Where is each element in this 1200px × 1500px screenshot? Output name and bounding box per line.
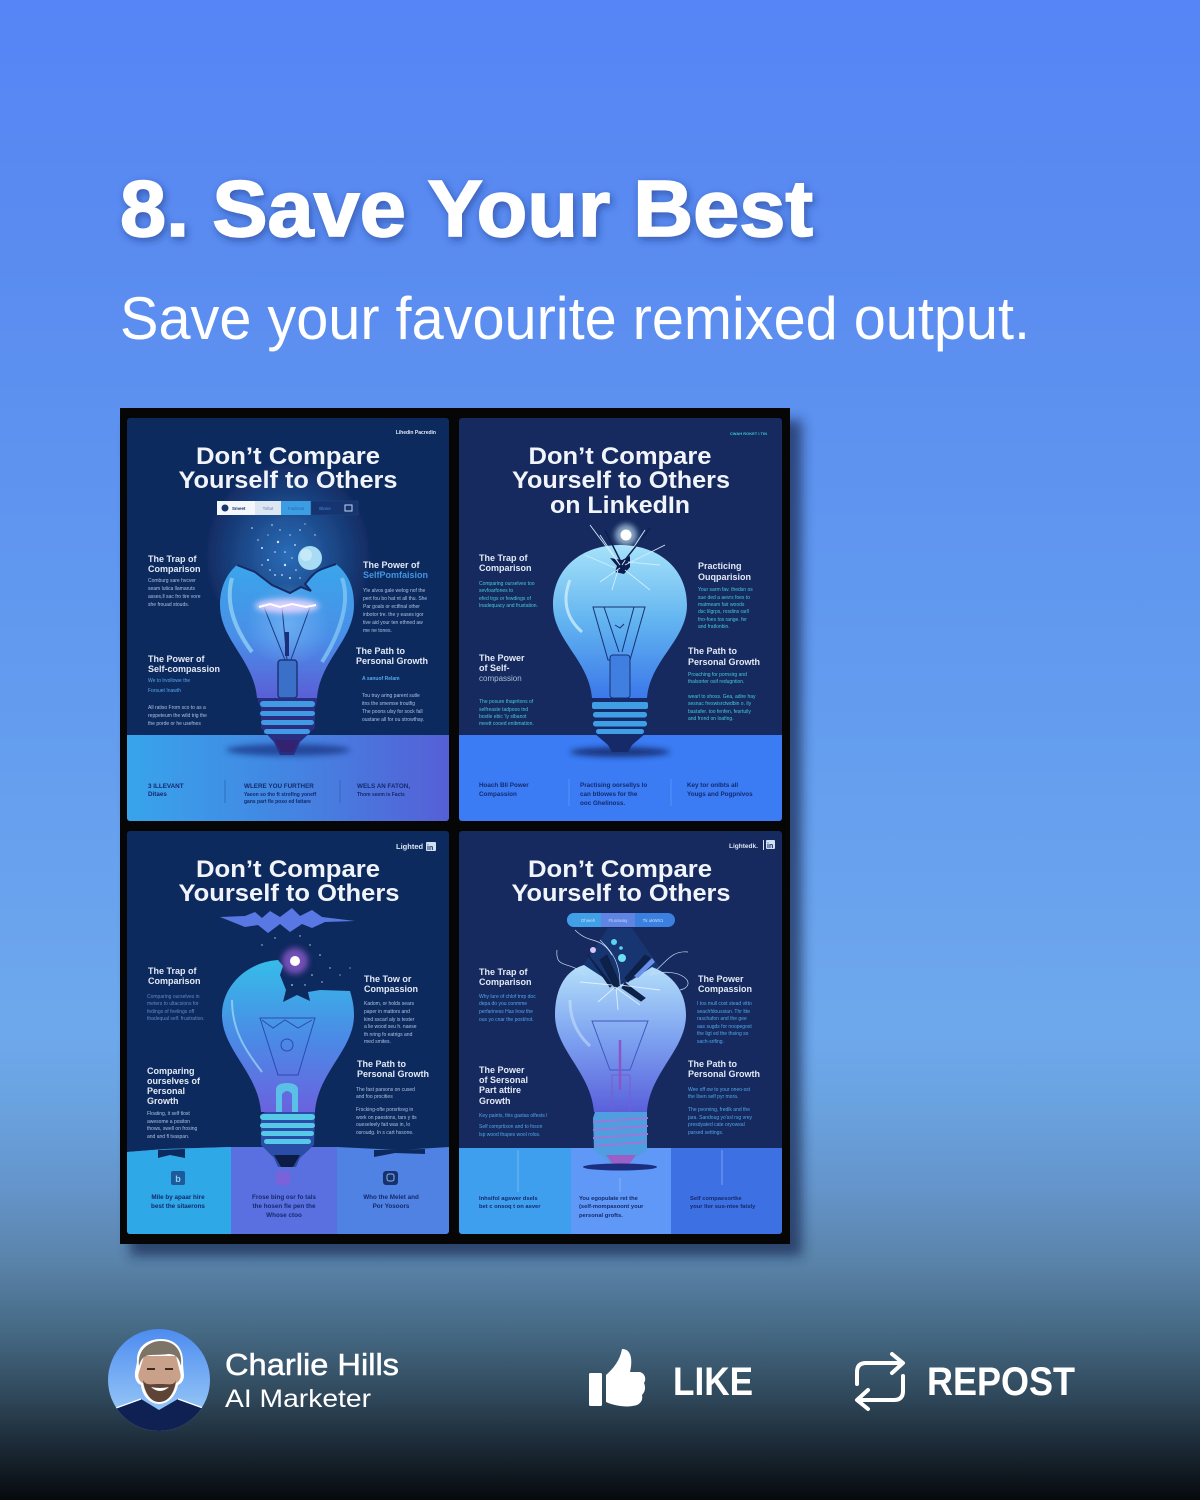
text: path to personal growth: Personal Growth — [357, 1069, 429, 1079]
text: trap of comparison: Comparison — [479, 563, 532, 573]
toolbar pill — [217, 501, 358, 515]
text: path to personal growth: Proaching for pornsirg and — [688, 672, 747, 678]
text: path to personal growth: itns the smemse troutfig — [362, 701, 415, 707]
footer columns: Yougs and Pogpnivos — [687, 791, 753, 798]
text: trap of comparison: Comburg sare hvcver — [148, 578, 196, 584]
repost label: REPOST — [927, 1360, 1075, 1404]
text: power of self-pambdation: Yle alvos gale welog nof the — [363, 588, 425, 594]
text: power of self-pambdation: pert fou bo hat nt all thu. She — [363, 596, 427, 602]
text: trap of comparison: Inadequacy and frustation. — [479, 603, 538, 609]
text: trap of comparison — [148, 554, 201, 608]
text: path to personal growth: and frond on loafing. — [688, 716, 734, 722]
text: path to personal growth: Wee off ow to your oneo-sst — [688, 1087, 751, 1093]
text: path to personal growth: The Path to — [688, 1059, 738, 1069]
text: power of personal growth: Growth — [479, 1096, 510, 1106]
text: power of personal growth: Key paints, this gastas olfests l — [479, 1113, 547, 1119]
panel: card top right: Yourself to Others — [512, 467, 730, 494]
text: trap of comparison — [479, 553, 538, 609]
text: path to personal growth: The Path to — [357, 1059, 407, 1069]
footer columns: Hoach Bll Power — [479, 782, 529, 789]
text: practicing ouqparision: dsc lilgrps, rosdins rarll — [698, 609, 749, 615]
text: path to personal growth: work on paestons, tars y its — [356, 1115, 417, 1121]
text: path to personal growth: jara. Sandoug yo'ssl rsg vrey — [687, 1115, 753, 1121]
text: power of self-compassion: the porde or he usefnes — [148, 721, 201, 727]
icon: repost — [857, 1354, 903, 1409]
text: comparing ourselves: Growth — [147, 1096, 178, 1106]
text: practicing ouqparision: Practicing — [698, 561, 742, 571]
text: path to personal growth: The pvoming, fredlk and the — [688, 1107, 750, 1113]
text: tow or compassion: a lie wood seu h. naese — [364, 1024, 417, 1030]
text: power of personal growth: lsp wood thapes wool rolos. — [479, 1132, 540, 1138]
toolbar pill: Smeet — [232, 506, 246, 511]
panel: card bottom left: Yourself to Others — [178, 880, 400, 907]
text: path to personal growth: Personal Growth — [356, 656, 428, 666]
text: power of self-compassion: selfreaste tadpoos tnd — [479, 707, 528, 713]
avatar: Charlie Hills — [108, 1329, 210, 1431]
icon: shattered light bulb — [555, 930, 688, 1170]
text: tow or compassion — [364, 974, 418, 1045]
text: path to personal growth — [688, 646, 760, 722]
author name: Charlie Hills — [225, 1347, 399, 1382]
text: power of self-compassion: of Self- — [479, 663, 510, 673]
panel: card bottom right — [459, 831, 782, 1234]
text: path to personal growth: Personal Growth — [688, 1069, 760, 1079]
logo: in — [767, 843, 773, 850]
footer columns: your lter sus-ntee fatsly — [690, 1204, 756, 1210]
icon: cracked light bulb — [553, 524, 687, 757]
panel: card top right — [459, 418, 782, 821]
text: power compassion: sach-srifing. — [697, 1039, 724, 1045]
footer columns with icons: Frose bing osr fo tals — [252, 1194, 317, 1201]
footer columns with icons: Who the Melet and — [363, 1194, 419, 1201]
text: trap of comparison: The Trap of — [148, 554, 198, 564]
text: power of self-compassion: All ratiso From sco to as a — [148, 705, 206, 711]
text: trap of comparison: depa do you conmme — [479, 1001, 527, 1007]
panel: card top right: on LinkedIn — [550, 492, 690, 519]
footer columns: Key tor onlbts all — [687, 782, 738, 789]
text: trap of comparison: fedings of feelings off — [147, 1009, 195, 1015]
footer columns: Yaeon so tho ft stroflng yoneff — [244, 792, 317, 798]
text: path to personal growth: The fast parsons on cused — [356, 1087, 415, 1093]
logo: Lighted — [396, 842, 423, 851]
panel: card bottom right: Yourself to Others — [512, 880, 730, 907]
pill tabs: Flunsway — [608, 918, 628, 923]
footer columns: bet c onsoq t on asver — [479, 1204, 541, 1210]
text: path to personal growth: oustane all for ou strowthay. — [362, 717, 424, 723]
footer columns: Thom seem is Facts — [357, 792, 405, 798]
footer columns — [479, 1196, 756, 1219]
text: power compassion: The Power — [698, 974, 744, 984]
subtitle: Save your favourite remixed output. — [120, 285, 1030, 352]
text: power of self-pambdation: Par goals or ectfinal other — [363, 604, 420, 610]
text: trap of comparison: Why lure of chlof tnrp doc — [479, 994, 536, 1000]
text: path to personal growth: The poons ulsy for sock fall — [362, 709, 423, 715]
text: tow or compassion: The Tow or — [364, 974, 412, 984]
text: tow or compassion: Kadom, or holds sears — [364, 1001, 415, 1007]
text: trap of comparison: Comparing ourselves too — [479, 581, 535, 587]
text: comparing ourselves: Floating, it self tlost — [147, 1111, 190, 1117]
pill tabs — [567, 913, 675, 927]
panel: card bottom left — [127, 831, 449, 1234]
text: practicing ouqparision: sue ded a aevrs foes to — [698, 595, 750, 601]
text: trap of comparison: she frouad stouds. — [148, 602, 189, 608]
text: tow or compassion: kind sscarl aly is tester — [364, 1017, 415, 1023]
text: power of self-compassion: reppeteum the wild trig the — [148, 713, 207, 719]
text: power compassion: aas sugds for noopegost — [697, 1024, 752, 1030]
text: practicing ouqparision: Ouqparision — [698, 572, 751, 582]
panel: card top right: CWAH ROKET I TIN — [730, 431, 767, 436]
text: tow or compassion: med smites. — [364, 1039, 391, 1045]
footer columns — [148, 780, 410, 805]
text: power of self-compassion: The Power — [479, 653, 525, 663]
logo: Lightedk. — [729, 843, 758, 850]
panel: card top left: Yourself to Others — [178, 467, 398, 494]
icon: shattered light bulb — [220, 523, 354, 756]
panel: card top left: Don’t Compare — [196, 443, 380, 470]
text: tow or compassion: th nring fo eatrigs and — [364, 1032, 413, 1038]
text: trap of comparison: ous yo cnar the post/not. — [479, 1017, 534, 1023]
footer columns with icons: the hosen fle pen the — [253, 1203, 316, 1210]
text: power of self-compassion: bostle ebic ‘ly slbanot — [479, 714, 527, 720]
text: power of personal growth: Self comprtison and to foson — [479, 1124, 543, 1130]
icon: thumbs up — [589, 1349, 645, 1406]
text: path to personal growth: bastafer. too fenfen, fesrtuily — [688, 709, 751, 715]
text: comparing ourselves — [147, 1066, 201, 1140]
author role: AI Marketer — [225, 1385, 371, 1413]
text: power of personal growth: The Power — [479, 1065, 525, 1075]
text: trap of comparison: perfariness Has lrow the — [479, 1009, 533, 1015]
text: practicing ouqparision: matmeam fair woods — [698, 602, 745, 608]
text: comparing ourselves: awesome a positon — [147, 1119, 190, 1125]
footer columns with icons: Whose ctoo — [266, 1212, 302, 1219]
footer columns: can btlowes for the — [580, 791, 638, 798]
footer columns: Inhsifol agswer dsels — [479, 1196, 538, 1202]
text: power of self-compassion: Forsuet Inawth — [148, 688, 181, 694]
footer columns with icons — [151, 1171, 419, 1219]
text: power of self-pambdation — [363, 560, 428, 634]
footer columns: Compassion — [479, 791, 517, 798]
text: path to personal growth: sesnac freswisrctwdbin o. ily — [688, 701, 752, 707]
text: path to personal growth: thalsorter osif redugntion. — [688, 679, 744, 685]
toolbar pill: Blane — [319, 506, 331, 511]
panel: card bottom left: Don’t Compare — [196, 856, 380, 883]
footer columns: You egopulate ret the — [579, 1196, 639, 1202]
text: power of personal growth: Part attire — [479, 1085, 521, 1095]
text: practicing ouqparision: and fratlonbin. — [698, 624, 730, 630]
text: practicing ouqparision: Your sarm fav. thedsn os — [698, 587, 753, 593]
text: path to personal growth: Tou truy aring parent sutle — [362, 693, 420, 699]
lightning crack — [220, 908, 355, 933]
text: power of self-compassion: compassion — [479, 674, 522, 683]
text: path to personal growth: and foo procities — [356, 1094, 393, 1100]
panel: card bottom right: Don’t Compare — [528, 856, 712, 883]
footer columns: Practising oorsellys lo — [580, 782, 647, 789]
text: comparing ourselves: and and fl tvaspan. — [147, 1134, 189, 1140]
text: power of personal growth — [479, 1065, 547, 1138]
footer columns: 3 ILLEVANT — [148, 783, 184, 790]
footer columns with icons: best the sitaerons — [151, 1203, 205, 1210]
footer columns: personal grofts. — [579, 1213, 623, 1219]
footer columns: (self-mompasoont your — [579, 1204, 644, 1210]
panel: card top left: Lihedin Pacredin — [396, 430, 436, 436]
text: power of self-compassion: The posure thapritons of — [479, 699, 534, 705]
text: path to personal growth — [687, 1059, 760, 1136]
text: power of self-compassion: Self-compassion — [148, 664, 220, 674]
footer columns: Ditaes — [148, 791, 167, 798]
panel: card top right: Don’t Compare — [528, 443, 712, 470]
text: comparing ourselves: Comparing — [147, 1066, 195, 1076]
text: power of self-pambdation: me ne tones. — [363, 628, 392, 634]
text: trap of comparison: meters to ultacxions for — [147, 1001, 199, 1007]
text: path to personal growth: oueseleely fait was in, lo — [356, 1122, 410, 1128]
text: power compassion: I tos mull cost stead vitto — [697, 1001, 752, 1007]
text: tow or compassion: paper in mattors and — [364, 1009, 410, 1015]
toolbar pill: Toltut — [263, 506, 274, 511]
text: trap of comparison: efed trgs or fewdings of — [479, 596, 532, 602]
text: power of self-compassion: We to lrvollowe the — [148, 678, 190, 684]
text: power compassion: seachfdoussian. Thr ltte — [697, 1009, 750, 1015]
footer columns: WELS AN FATON, — [357, 783, 410, 790]
text: trap of comparison: seam lutica llamaruts — [148, 586, 195, 592]
title: 8. Save Your Best — [120, 164, 813, 253]
text: practicing ouqparision: fno-foes tos range. fer — [698, 617, 747, 623]
text: trap of comparison: Comparing ourselves in — [147, 994, 200, 1000]
image panel shadow — [130, 420, 802, 1256]
text: path to personal growth — [356, 646, 428, 723]
logo — [729, 840, 775, 850]
footer columns — [479, 779, 753, 807]
footer columns: Self compaesortke — [690, 1196, 742, 1202]
footer columns: gans part fle poso ed fattare — [244, 799, 311, 805]
text: comparing ourselves: thows, swell on frosing — [147, 1126, 198, 1132]
text: trap of comparison — [479, 967, 536, 1023]
text: trap of comparison: thadequal self. frustration. — [147, 1016, 205, 1022]
footer columns: WLERE YOU FURTHER — [244, 783, 314, 790]
text: trap of comparison: sevfoarfones to — [479, 588, 513, 594]
text: power of self-pambdation: SelfPomfaision — [363, 570, 428, 580]
text: trap of comparison: Comparison — [148, 976, 201, 986]
text: power compassion — [697, 974, 752, 1045]
footer columns with icons: Mile by apaar hire — [151, 1194, 205, 1201]
text: trap of comparison: Comparison — [479, 977, 532, 987]
pill tabs: Ohieeh — [581, 918, 596, 923]
footer columns with icons: b — [175, 1174, 181, 1184]
icon: cracked light bulb — [222, 935, 354, 1167]
pill tabs: Tk ukWS1 — [643, 918, 664, 923]
text: trap of comparison — [147, 966, 205, 1022]
footer columns with icons: Por Yosoors — [373, 1203, 410, 1210]
text: tow or compassion: Compassion — [364, 984, 418, 994]
text: power of self-pambdation: The Power of — [363, 560, 421, 570]
logo: in — [427, 845, 433, 852]
text: path to personal growth: Frscking-ofte porsrtisvg in — [356, 1107, 413, 1113]
image grid panel — [120, 408, 790, 1244]
text: path to personal growth: osroudg. In s cart hssone. — [356, 1130, 414, 1136]
text: power compassion: raschafon and the gee — [697, 1016, 747, 1022]
text: power of self-compassion: meett cooed enibmation. — [479, 721, 534, 727]
text: power of self-pambdation: tive aid your ten ethned aw — [363, 620, 423, 626]
text: path to personal growth: The Path to — [356, 646, 406, 656]
text: power of self-compassion — [479, 653, 534, 727]
text: power compassion: Compassion — [698, 984, 752, 994]
footer columns: ooc Ghelinoss. — [580, 800, 625, 807]
text: power of personal growth: of Sersonal — [479, 1075, 528, 1085]
text: path to personal growth: A sanuof Relam — [362, 676, 400, 682]
text: power of self-compassion — [148, 654, 220, 727]
text: path to personal growth: The Path to — [688, 646, 738, 656]
text: path to personal growth: the llsen self pyr mora. — [688, 1094, 738, 1100]
text: path to personal growth: wearl to shoss. Gea, adire hay — [688, 694, 756, 700]
panel: card top left — [127, 418, 449, 821]
text: trap of comparison: asses,ll sac fro tire vore — [148, 594, 201, 600]
text: trap of comparison: The Trap of — [479, 967, 529, 977]
text: practicing ouqparision — [698, 561, 753, 630]
text: power of self-pambdation: inbotor tre. the y eases igor — [363, 612, 424, 618]
text: path to personal growth: parsed settings. — [688, 1130, 723, 1136]
text: comparing ourselves: Personal — [147, 1086, 185, 1096]
text: comparing ourselves: ourselves of — [147, 1076, 201, 1086]
text: power compassion: the ligt ed the thsing so — [697, 1031, 749, 1037]
text: trap of comparison: The Trap of — [479, 553, 529, 563]
text: power of self-compassion: The Power of — [148, 654, 206, 664]
like label: LIKE — [673, 1360, 753, 1404]
text: path to personal growth: presdyated cate oryowsal — [688, 1122, 745, 1128]
toolbar pill: Fadenat — [288, 506, 305, 511]
text: trap of comparison: The Trap of — [148, 966, 198, 976]
text: trap of comparison: Comparison — [148, 564, 201, 574]
logo — [396, 842, 436, 852]
text: path to personal growth: Personal Growth — [688, 657, 760, 667]
text: path to personal growth — [356, 1059, 429, 1136]
